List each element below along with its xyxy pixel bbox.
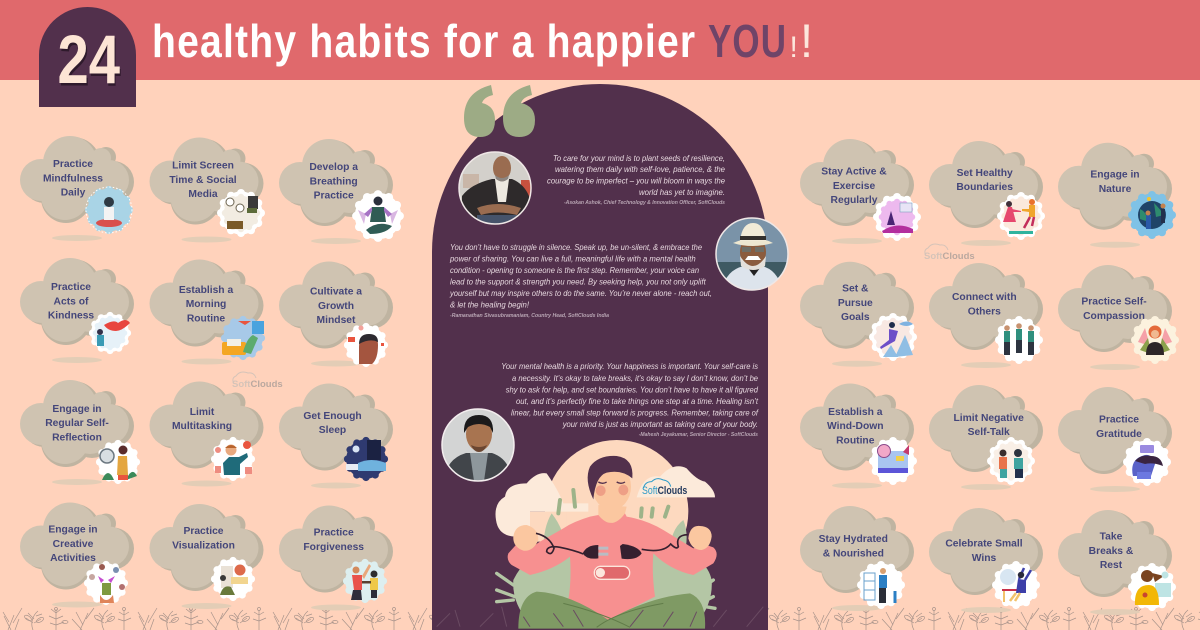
habit: Set Healthy Boundaries: Boundaries (956, 182, 1013, 193)
habit: Establish a Morning Routine: Establish a (179, 285, 233, 296)
central arch panel (432, 84, 768, 630)
habit: Practice Acts of Kindness (20, 258, 134, 363)
habit: Stay Hydrated & Nourished: & Nourished (823, 548, 884, 559)
portrait: Mahesh Jeyakumar (442, 409, 514, 481)
title banner (0, 0, 1200, 80)
habit: Develop a Breathing Practice: Practice (314, 191, 354, 202)
icon: meditating woman (85, 186, 133, 234)
icon: night bedroom (344, 437, 388, 481)
watermark: SoftClouds right: SoftClouds (924, 251, 975, 262)
quote: Mahesh Jeyakumar: shy to ask for help, and set boundaries. You don’t have to have it all figured (506, 384, 758, 394)
watermark: SoftClouds left: SoftClouds (232, 379, 283, 390)
icon: two friends (343, 559, 387, 603)
habit: Celebrate Small Wins (929, 508, 1043, 613)
icon: self-hugging woman (1131, 316, 1179, 364)
habit: Limit Screen Time & Social Media: Media (188, 189, 218, 200)
habit: Practice Mindfulness Daily: Daily (61, 188, 86, 199)
habit: Set & Pursue Goals (800, 262, 917, 367)
habit: Limit Screen Time & Social Media: Limit Screen (172, 160, 234, 172)
quote: Mahesh Jeyakumar: a necessity. It’s okay to take breaks, it’s okay to say I don’t know, don’t be (512, 373, 758, 383)
habit: Establish a Wind-Down Routine: Establish a (828, 407, 883, 418)
habit: Get Enough Sleep: Get Enough (303, 411, 362, 422)
hands (513, 525, 712, 551)
quote: Ramanathan Sivasubramaniam (449, 242, 712, 319)
habit: Engage in Regular Self-Reflection: Reflection (52, 432, 102, 443)
icon: breathing woman (352, 190, 404, 242)
habit: Cultivate a Growth Mindset: Mindset (317, 315, 356, 326)
number badge: 24 (39, 7, 136, 107)
quote: Ramanathan Sivasubramaniam: & let the healing begin! (450, 300, 530, 310)
quote: Mahesh Jeyakumar: linear, but every small step forward is progress. Remember, taking care of (511, 408, 760, 418)
crossed legs (518, 592, 705, 629)
foliage overlay (437, 607, 763, 627)
habit: Practice Gratitude: Gratitude (1096, 429, 1142, 440)
habit: Practice Visualization: Visualization (172, 540, 235, 551)
peach panel behind shoulder (530, 512, 567, 542)
clouds (496, 466, 715, 537)
number badge: 24: 24 (59, 24, 121, 100)
quote: Asokan Ashok: To care for your mind is to plant seeds of resilience, (553, 153, 725, 163)
icon: man with water shelves (857, 561, 905, 609)
habit: Limit Multitasking (150, 382, 264, 486)
quote: Asokan Ashok: courage to be imperfect – you will bloom in ways the (547, 176, 725, 186)
habit: Practice Visualization (150, 504, 264, 609)
habit: Set & Pursue Goals: Pursue (838, 298, 873, 309)
habit: Set & Pursue Goals: Set & (842, 284, 869, 294)
icon: woman with mirror (96, 440, 140, 484)
icon: man multitasking (211, 437, 255, 481)
habit: Engage in Regular Self-Reflection (20, 380, 140, 485)
habit: Connect with Others: Others (968, 306, 1001, 317)
icon: head with ideas (344, 323, 388, 367)
habit: Celebrate Small Wins: Wins (972, 553, 997, 564)
quote: Asokan Ashok: watering them daily with self-love, patience, & the (555, 164, 725, 174)
habit: Practice Acts of Kindness: Kindness (48, 311, 94, 322)
quote: Mahesh Jeyakumar: out, and it’s perfectly fine to take things one step at a time. Healing isn’t (516, 396, 759, 406)
portrait: Ramanathan Sivasubramaniam (716, 218, 788, 292)
habit: Cultivate a Growth Mindset: Cultivate a (310, 286, 362, 298)
habit: Take Breaks & Rest (1058, 510, 1176, 615)
habit: Take Breaks & Rest: Breaks & (1089, 546, 1134, 557)
habit: Practice Acts of Kindness: Acts of (54, 296, 89, 307)
habit: Limit Multitasking: Limit (190, 407, 215, 418)
icon: group of people (995, 316, 1043, 364)
habit: Stay Active & Exercise Regularly: Regularly (831, 195, 878, 206)
habit: Limit Negative Self-Talk (929, 385, 1043, 490)
habit: Engage in Creative Activities: Creative (53, 539, 94, 550)
habit: Establish a Morning Routine (150, 260, 265, 364)
central illustration: person unplugging (437, 440, 763, 629)
icon: person relaxing (1128, 563, 1176, 611)
quote: Ramanathan Sivasubramaniam: -Ramanathan Sivasubramaniam, Country Head, SoftClouds India (450, 313, 609, 319)
icon: celebrating at desk (992, 561, 1040, 609)
quote: Mahesh Jeyakumar: Your mental health is a priority. Your happiness is important. Your self-care is (501, 361, 759, 371)
habit: Limit Multitasking: Multitasking (172, 421, 232, 432)
icon: girl with heart (89, 312, 131, 354)
habit: Take Breaks & Rest: Rest (1100, 560, 1123, 571)
habit: Stay Active & Exercise Regularly: Exercise (833, 181, 875, 192)
habit: Cultivate a Growth Mindset (279, 262, 393, 367)
habit: Practice Forgiveness: Practice (314, 528, 354, 538)
portrait: Asokan Ashok (459, 152, 531, 225)
habit: Practice Self-Compassion (1058, 265, 1179, 370)
quotation mark icon (464, 85, 535, 137)
habit: Practice Visualization: Practice (183, 526, 224, 537)
quote: Asokan Ashok: world has yet to imagine. (639, 187, 725, 197)
habit: Establish a Wind-Down Routine (800, 384, 917, 488)
habit: Practice Forgiveness (279, 506, 393, 610)
habit: Set Healthy Boundaries (929, 141, 1045, 246)
habit: Practice Acts of Kindness: Practice (51, 282, 91, 293)
habit: Develop a Breathing Practice (279, 139, 404, 244)
icon: two people talking (987, 437, 1035, 485)
quote: Ramanathan Sivasubramaniam: You don’t have to struggle in silence. Speak up, be un-silent, & embrace the (450, 242, 702, 252)
habit: Engage in Creative Activities: Activities (50, 553, 96, 564)
icon: thank you hug (1123, 438, 1171, 486)
habit: Cultivate a Growth Mindset: Growth (318, 301, 354, 312)
habit: Practice Forgiveness: Forgiveness (303, 542, 364, 553)
habit: Limit Screen Time & Social Media: Time & Social (169, 175, 237, 186)
habit: Get Enough Sleep (279, 384, 393, 488)
icon: screens and devices (217, 189, 265, 237)
habit: Engage in Nature (1058, 143, 1176, 248)
habit: Engage in Creative Activities (20, 502, 134, 608)
habit: Establish a Morning Routine: Routine (187, 313, 225, 324)
quote: Asokan Ashok: -Asokan Ashok, Chief Technology & Innovation Officer, SoftClouds (564, 200, 725, 206)
habit: Practice Gratitude (1058, 387, 1172, 492)
habit: Practice Self-Compassion: Compassion (1083, 311, 1145, 322)
habit: Stay Active & Exercise Regularly (800, 139, 921, 244)
plugs and cables (536, 533, 688, 554)
habit: Set & Pursue Goals: Goals (841, 312, 870, 323)
habit: Engage in Nature: Engage in (1090, 170, 1140, 180)
title: ! (800, 14, 813, 67)
habit: Stay Hydrated & Nourished (800, 506, 914, 611)
habit: Celebrate Small Wins: Celebrate Small (945, 538, 1023, 550)
quote: Mahesh Jeyakumar: your mind is just as important as taking care of your body. (562, 419, 758, 429)
habit: Practice Gratitude: Practice (1099, 414, 1139, 426)
habit: Limit Negative Self-Talk: Self-Talk (968, 427, 1010, 438)
habit: Establish a Morning Routine: Morning (186, 299, 226, 310)
watermark: SoftClouds right (924, 244, 975, 262)
toggle switch (594, 566, 630, 579)
SoftClouds logo: SoftClouds (642, 485, 687, 497)
habit: Limit Negative Self-Talk: Limit Negative (954, 413, 1024, 424)
head (592, 463, 631, 510)
sun (545, 440, 688, 583)
habit: Engage in Regular Self-Reflection: Engage in (52, 404, 102, 415)
habit: Set Healthy Boundaries: Set Healthy (957, 168, 1013, 179)
quote: Ramanathan Sivasubramaniam: lead to the support & strength you need. By seeking help, you not only uplift (450, 276, 706, 286)
background leaves (497, 490, 715, 623)
habit: Take Breaks & Rest: Take (1100, 532, 1123, 542)
habit: Develop a Breathing Practice: Develop a (309, 162, 358, 173)
title: YOU (708, 15, 786, 67)
icon: two people pushing apart (997, 192, 1045, 240)
icon: clock and calendar (869, 437, 917, 485)
habit: Establish a Wind-Down Routine: Routine (836, 435, 875, 446)
habit: Practice Mindfulness Daily: Practice (53, 159, 93, 170)
icon: globe and people (1128, 191, 1176, 239)
quote: Mahesh Jeyakumar (501, 361, 760, 438)
habit: Develop a Breathing Practice: Breathing (310, 176, 358, 187)
habit: Limit Screen Time & Social Media (150, 138, 265, 242)
habit: Stay Active & Exercise Regularly: Stay Active & (821, 166, 887, 178)
icon: waking up in bedroom (221, 316, 265, 360)
habit: Engage in Nature: Nature (1099, 184, 1132, 195)
habit: Engage in Regular Self-Reflection: Regular Self- (45, 418, 109, 429)
habit: Establish a Wind-Down Routine: Wind-Down (827, 421, 884, 432)
icon: creative tools (84, 561, 128, 605)
body (508, 513, 717, 620)
SoftClouds logo (642, 479, 687, 497)
habit: Get Enough Sleep: Sleep (319, 425, 346, 436)
quote: Mahesh Jeyakumar: -Mahesh Jeyakumar, Senior Director - SoftClouds (639, 432, 758, 438)
habit: Stay Hydrated & Nourished: Stay Hydrated (819, 534, 888, 545)
icon: exercising (873, 193, 921, 241)
habit: Connect with Others (929, 263, 1043, 368)
habit: Engage in Creative Activities: Engage in (48, 524, 98, 536)
icon: visualization (211, 557, 255, 601)
floral strip (0, 606, 1200, 630)
title: ! (790, 31, 798, 64)
habit: Practice Mindfulness Daily (20, 136, 134, 241)
quote: Ramanathan Sivasubramaniam: condition - opening to someone is the first step. Remember, your voice can (450, 265, 699, 275)
number badge: 24: 24 (58, 21, 120, 98)
habit: Practice Mindfulness Daily: Mindfulness (43, 173, 103, 184)
icon: runner on mountains (869, 313, 917, 361)
quote: Ramanathan Sivasubramaniam: yourself but may inspire others to do the same. You’re never alone - reach out, (449, 288, 712, 298)
habit: Practice Self-Compassion: Practice Self- (1081, 296, 1147, 308)
quote: Ramanathan Sivasubramaniam: power of sharing. You can live a full, meaningful life with a mental health (449, 254, 696, 264)
habit: Connect with Others: Connect with (952, 292, 1017, 303)
watermark: SoftClouds left (232, 372, 283, 390)
title: healthy habits for a happier (152, 16, 695, 68)
quote: Asokan Ashok (547, 153, 725, 206)
